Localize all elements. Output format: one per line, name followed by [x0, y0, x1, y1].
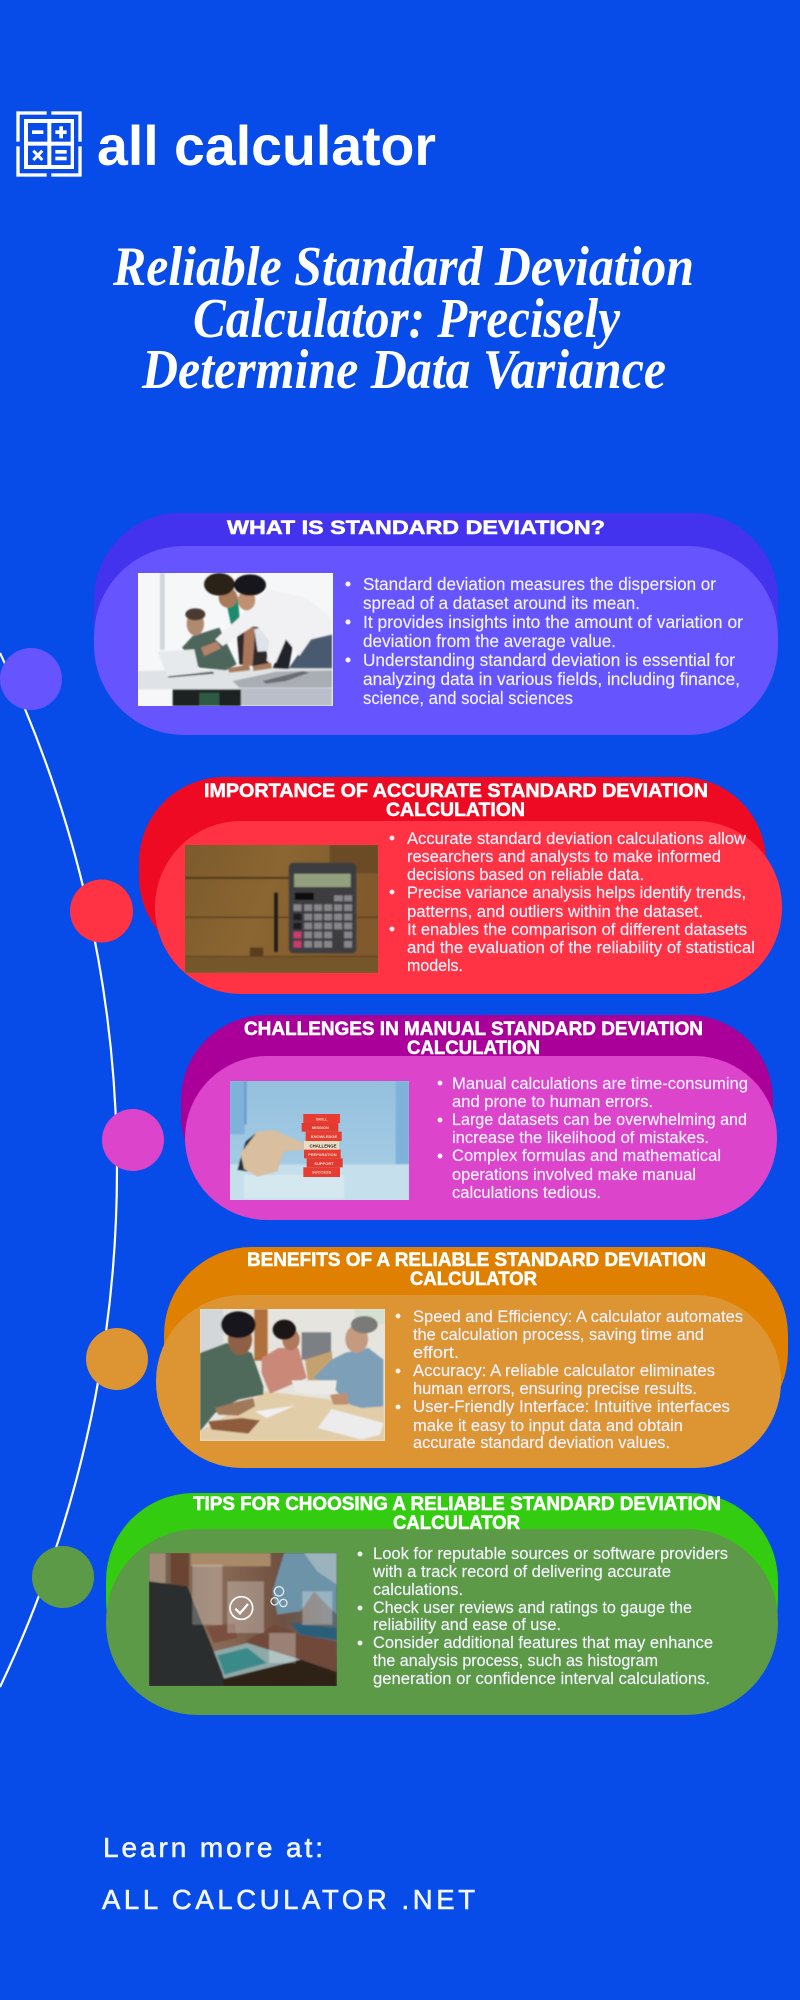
heading: CALCULATION	[407, 1037, 540, 1059]
bullet list: It provides insights into the amount of variation or	[363, 612, 743, 632]
bullet list: accurate standard deviation values.	[413, 1433, 670, 1452]
panel front	[156, 1295, 781, 1468]
bullet list: Understanding standard deviation is essential for	[363, 650, 735, 670]
timeline dot 4	[86, 1328, 148, 1390]
icon: check ring	[230, 1597, 253, 1619]
photo: calculator on wood desk	[185, 845, 378, 973]
logo wordmark: all calculator	[97, 114, 436, 177]
bullet list: Precise variance analysis helps identify trends,	[407, 883, 746, 902]
bullet list: Look for reputable sources or software providers	[373, 1544, 728, 1563]
bullet list: models.	[407, 956, 463, 975]
heading: CALCULATOR	[410, 1268, 537, 1290]
photo blocks: PREPARATION	[308, 1152, 337, 1157]
title: Calculator: Precisely	[193, 288, 621, 350]
icon: check mark	[235, 1604, 248, 1613]
bullet list: make it easy to input data and obtain	[413, 1416, 683, 1435]
bullet list: Check user reviews and ratings to gauge the	[373, 1598, 692, 1617]
bullet list: human errors, ensuring precise results.	[413, 1379, 697, 1398]
bullet list: calculations.	[373, 1580, 463, 1599]
timeline dot 2	[70, 880, 133, 942]
panel: benefits of a reliable calculator	[156, 1247, 788, 1468]
icon: calculator keypad	[15, 110, 83, 178]
heading: WHAT IS STANDARD DEVIATION?	[227, 517, 605, 539]
heading	[247, 1249, 706, 1290]
timeline dot 5	[32, 1546, 94, 1608]
photo: hand and red block tower	[230, 1081, 409, 1200]
heading: TIPS FOR CHOOSING A RELIABLE STANDARD DEVIATION	[193, 1493, 721, 1515]
bullet list: Standard deviation measures the dispersion or	[363, 574, 716, 594]
photo: laptop with checkmark overlay	[149, 1553, 337, 1686]
heading	[204, 780, 708, 821]
bullet list: and the evaluation of the reliability of statistical	[407, 938, 755, 957]
title	[112, 236, 694, 401]
heading	[193, 1493, 721, 1534]
bullet list	[438, 1074, 748, 1202]
photo blocks: SKILL	[316, 1116, 328, 1121]
bullet list: Speed and Efficiency: A calculator automates	[413, 1307, 743, 1326]
photo blocks: KNOWLEDGE	[311, 1134, 338, 1139]
heading: CALCULATION	[386, 799, 525, 821]
photo blocks	[302, 1114, 343, 1177]
bullet list: with a track record of delivering accurate	[372, 1562, 671, 1581]
photo: three people reviewing a document	[200, 1309, 385, 1441]
photo blocks: MISSION	[312, 1125, 329, 1130]
bullet list: generation or confidence interval calculations.	[373, 1669, 710, 1688]
panel: challenges in manual calculation	[181, 1015, 777, 1220]
bullet list	[346, 574, 743, 708]
title: Reliable Standard Deviation	[112, 236, 694, 298]
title: Determine Data Variance	[141, 339, 666, 401]
bullet list: operations involved make manual	[452, 1165, 696, 1184]
bullet list: Complex formulas and mathematical	[452, 1146, 721, 1165]
panel front	[155, 821, 782, 994]
bullet list: and prone to human errors.	[452, 1092, 653, 1111]
bullet list: researchers and analysts to make informed	[407, 847, 721, 866]
bullet list: User-Friendly Interface: Intuitive interfaces	[413, 1397, 730, 1416]
photo blocks: SUCCESS	[312, 1170, 332, 1175]
bullet list: spread of a dataset around its mean.	[363, 593, 640, 613]
panel back	[181, 1015, 773, 1200]
photo blocks: SUPPORT	[314, 1161, 334, 1166]
footer call to action	[102, 1832, 475, 1915]
panel back	[139, 777, 766, 962]
footer call to action: ALL CALCULATOR .NET	[102, 1884, 475, 1915]
bullet list: the analysis process, such as histogram	[373, 1651, 658, 1670]
heading: CALCULATOR	[393, 1512, 520, 1534]
bullet list	[396, 1307, 743, 1452]
photo blocks: CHALLENGE	[310, 1143, 337, 1148]
panel: importance of accurate calculation	[139, 777, 782, 994]
heading	[244, 1018, 703, 1059]
panel front	[106, 1529, 778, 1715]
panel front	[94, 546, 778, 735]
bullet list: Consider additional features that may enhance	[373, 1633, 713, 1652]
panel back	[164, 1247, 788, 1440]
bullet list: deviation from the average value.	[363, 631, 616, 651]
bullet list: analyzing data in various fields, including finance,	[363, 669, 740, 689]
photo: team at laptop	[138, 573, 333, 706]
bullet list: calculations tedious.	[452, 1183, 601, 1202]
bullet list: Accuracy: A reliable calculator eliminates	[413, 1361, 715, 1380]
bullet list: Large datasets can be overwhelming and	[452, 1110, 747, 1129]
heading: CHALLENGES IN MANUAL STANDARD DEVIATION	[244, 1018, 703, 1040]
bullet list: Manual calculations are time-consuming	[452, 1074, 748, 1093]
bullet list: decisions based on reliable data.	[407, 865, 644, 884]
panel back	[106, 1493, 778, 1688]
timeline dot 1	[0, 648, 62, 710]
bullet list: increase the likelihood of mistakes.	[452, 1128, 709, 1147]
bullet list: reliability and ease of use.	[373, 1615, 561, 1634]
bullet list: patterns, and outliers within the dataset.	[407, 902, 703, 921]
panel: tips for choosing a calculator	[106, 1493, 778, 1715]
panel back	[94, 513, 778, 703]
bullet list: effort.	[413, 1343, 459, 1362]
panel front	[185, 1056, 777, 1220]
heading: IMPORTANCE OF ACCURATE STANDARD DEVIATION	[204, 780, 708, 802]
bullet list	[358, 1544, 728, 1688]
bullet list: the calculation process, saving time and	[413, 1325, 704, 1344]
footer call to action: Learn more at:	[103, 1832, 323, 1863]
logo	[15, 110, 436, 178]
heading: BENEFITS OF A RELIABLE STANDARD DEVIATION	[247, 1249, 706, 1271]
bullet list	[390, 829, 755, 975]
timeline curve	[0, 653, 117, 1687]
timeline dot 3	[102, 1109, 164, 1171]
bullet list: It enables the comparison of different datasets	[407, 920, 747, 939]
bullet list: Accurate standard deviation calculations allow	[407, 829, 747, 848]
bullet list: science, and social sciences	[363, 688, 573, 708]
icon: gears	[271, 1587, 287, 1607]
panel: what is standard deviation	[94, 513, 778, 735]
